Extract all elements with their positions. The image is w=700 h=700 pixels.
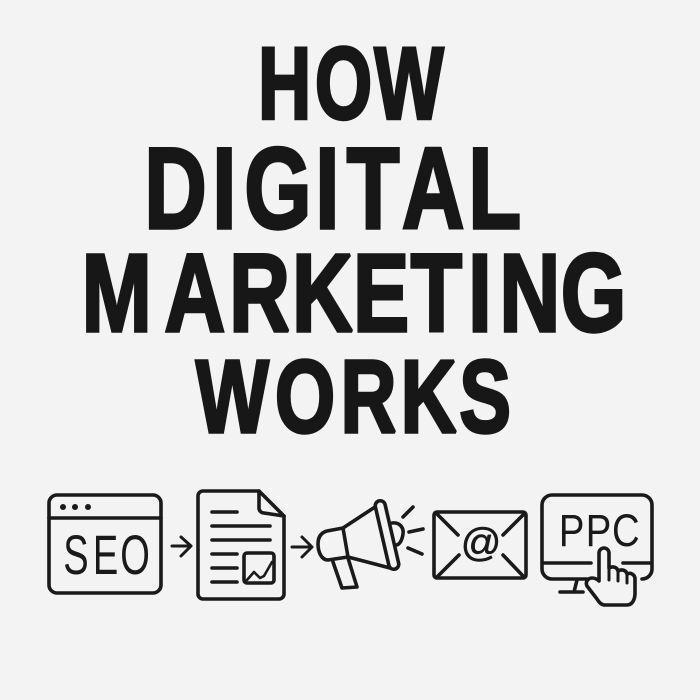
title bbox=[82, 27, 626, 455]
arrow: SEO to content bbox=[172, 537, 191, 556]
icon: SEO browser window: SEO bbox=[63, 525, 150, 587]
icon: email envelope bbox=[434, 512, 526, 578]
icon: email envelope: @ bbox=[461, 521, 501, 565]
title: HOW bbox=[258, 27, 444, 140]
icon: pointing hand bbox=[586, 548, 635, 605]
title: MARKETING bbox=[82, 231, 626, 355]
icon: SEO browser window bbox=[49, 495, 161, 593]
icon: PPC monitor with pointing hand: PPC bbox=[559, 505, 640, 556]
arrow: content to megaphone bbox=[292, 537, 312, 557]
icon: PPC monitor with pointing hand bbox=[542, 495, 652, 605]
icon: content document bbox=[198, 491, 284, 599]
title: WORKS bbox=[196, 340, 511, 455]
icon: megaphone bbox=[318, 500, 423, 588]
title: DIGITAL bbox=[144, 124, 521, 253]
